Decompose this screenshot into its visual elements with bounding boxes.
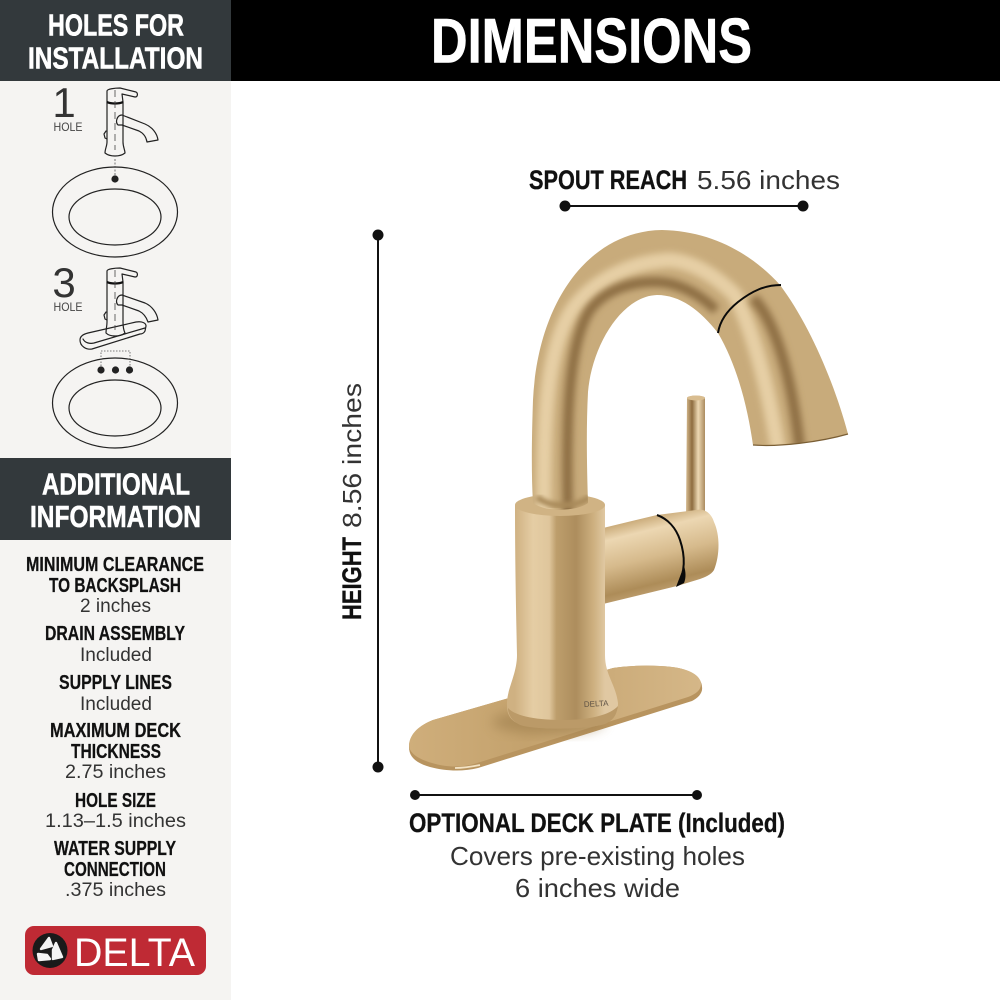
spec: drain assembly: DRAIN ASSEMBLY (45, 623, 186, 645)
label: spout reach: 5.56 inches (697, 165, 840, 195)
spec: supply lines (59, 672, 172, 715)
product: faucet (409, 230, 848, 771)
icon: sink with one hole (52, 159, 178, 257)
logo: Delta (25, 926, 206, 975)
heading: holes for installation: HOLES FOR (48, 8, 184, 42)
heading: additional information: INFORMATION (30, 499, 201, 534)
title: DIMENSIONS (431, 6, 752, 76)
dimension: spout reach (529, 165, 840, 212)
label: 3 hole: 3 (52, 259, 76, 306)
label: 1 hole (52, 79, 82, 134)
icon: single-hole faucet line art (104, 88, 158, 156)
label: 3 hole: HOLE (54, 300, 82, 314)
label: deck plate (409, 808, 785, 903)
spec: minimum clearance: TO BACKSPLASH (49, 575, 181, 597)
icon: three-hole faucet with deck plate line art (80, 268, 158, 349)
label: 3 hole (52, 259, 82, 314)
spec: maximum deck thickness: THICKNESS (71, 741, 161, 763)
spec: minimum clearance (26, 554, 204, 617)
lever handle (686, 396, 705, 522)
engraved brand mark: DELTA (584, 699, 609, 709)
spec: water supply connection (54, 838, 177, 901)
spec: water supply connection: .375 inches (65, 880, 166, 901)
deck plate (409, 666, 702, 771)
label: 1 hole: HOLE (54, 120, 82, 134)
spec: maximum deck thickness: MAXIMUM DECK (50, 720, 181, 742)
spec: drain assembly: Included (80, 645, 152, 666)
heading: holes for installation (28, 8, 203, 76)
spec: minimum clearance: 2 inches (80, 596, 151, 617)
spec: maximum deck thickness: 2.75 inches (65, 762, 166, 783)
panel: holes for installation (0, 0, 231, 448)
arrow: height measure (372, 230, 384, 772)
spec: supply lines: SUPPLY LINES (59, 672, 172, 694)
icon: sink with three holes (52, 351, 178, 448)
spec: supply lines: Included (80, 694, 152, 715)
spec: water supply connection: CONNECTION (64, 859, 166, 881)
label: deck plate: OPTIONAL DECK PLATE (Included) (409, 808, 785, 838)
label: 1 hole: 1 (52, 79, 76, 126)
logo: Delta: DELTA (74, 931, 195, 975)
spec: minimum clearance: MINIMUM CLEARANCE (26, 554, 204, 576)
spout (532, 230, 848, 520)
panel: additional information (0, 458, 231, 901)
panel: left sidebar background (0, 0, 231, 1000)
base body (507, 494, 618, 729)
spec: water supply connection: WATER SUPPLY (54, 838, 177, 860)
spec: drain assembly (45, 623, 186, 666)
header bar: dimensions (231, 0, 1000, 81)
dimension: optional deck plate (409, 790, 785, 903)
label: spout reach: SPOUT REACH (529, 165, 687, 195)
pull-down seam (718, 285, 781, 333)
heading: holes for installation: INSTALLATION (28, 40, 203, 76)
spec: hole size: HOLE SIZE (75, 790, 156, 812)
arrow: deck plate measure (410, 790, 702, 800)
label: height (337, 383, 367, 620)
arrow: spout reach measure (560, 200, 808, 212)
label: deck plate: 6 inches wide (515, 873, 680, 903)
label: deck plate: Covers pre-existing holes (450, 841, 745, 871)
label: spout reach (529, 165, 840, 195)
label: height: 8.56 inches (337, 383, 367, 528)
label: height: HEIGHT (337, 537, 367, 620)
dimension: height (337, 230, 384, 772)
handle cylinder (603, 510, 718, 604)
spec: hole size: 1.13–1.5 inches (45, 811, 186, 832)
spec: maximum deck thickness (50, 720, 181, 783)
spec: hole size (45, 790, 186, 832)
heading: additional information (30, 466, 201, 534)
heading: additional information: ADDITIONAL (42, 466, 190, 502)
